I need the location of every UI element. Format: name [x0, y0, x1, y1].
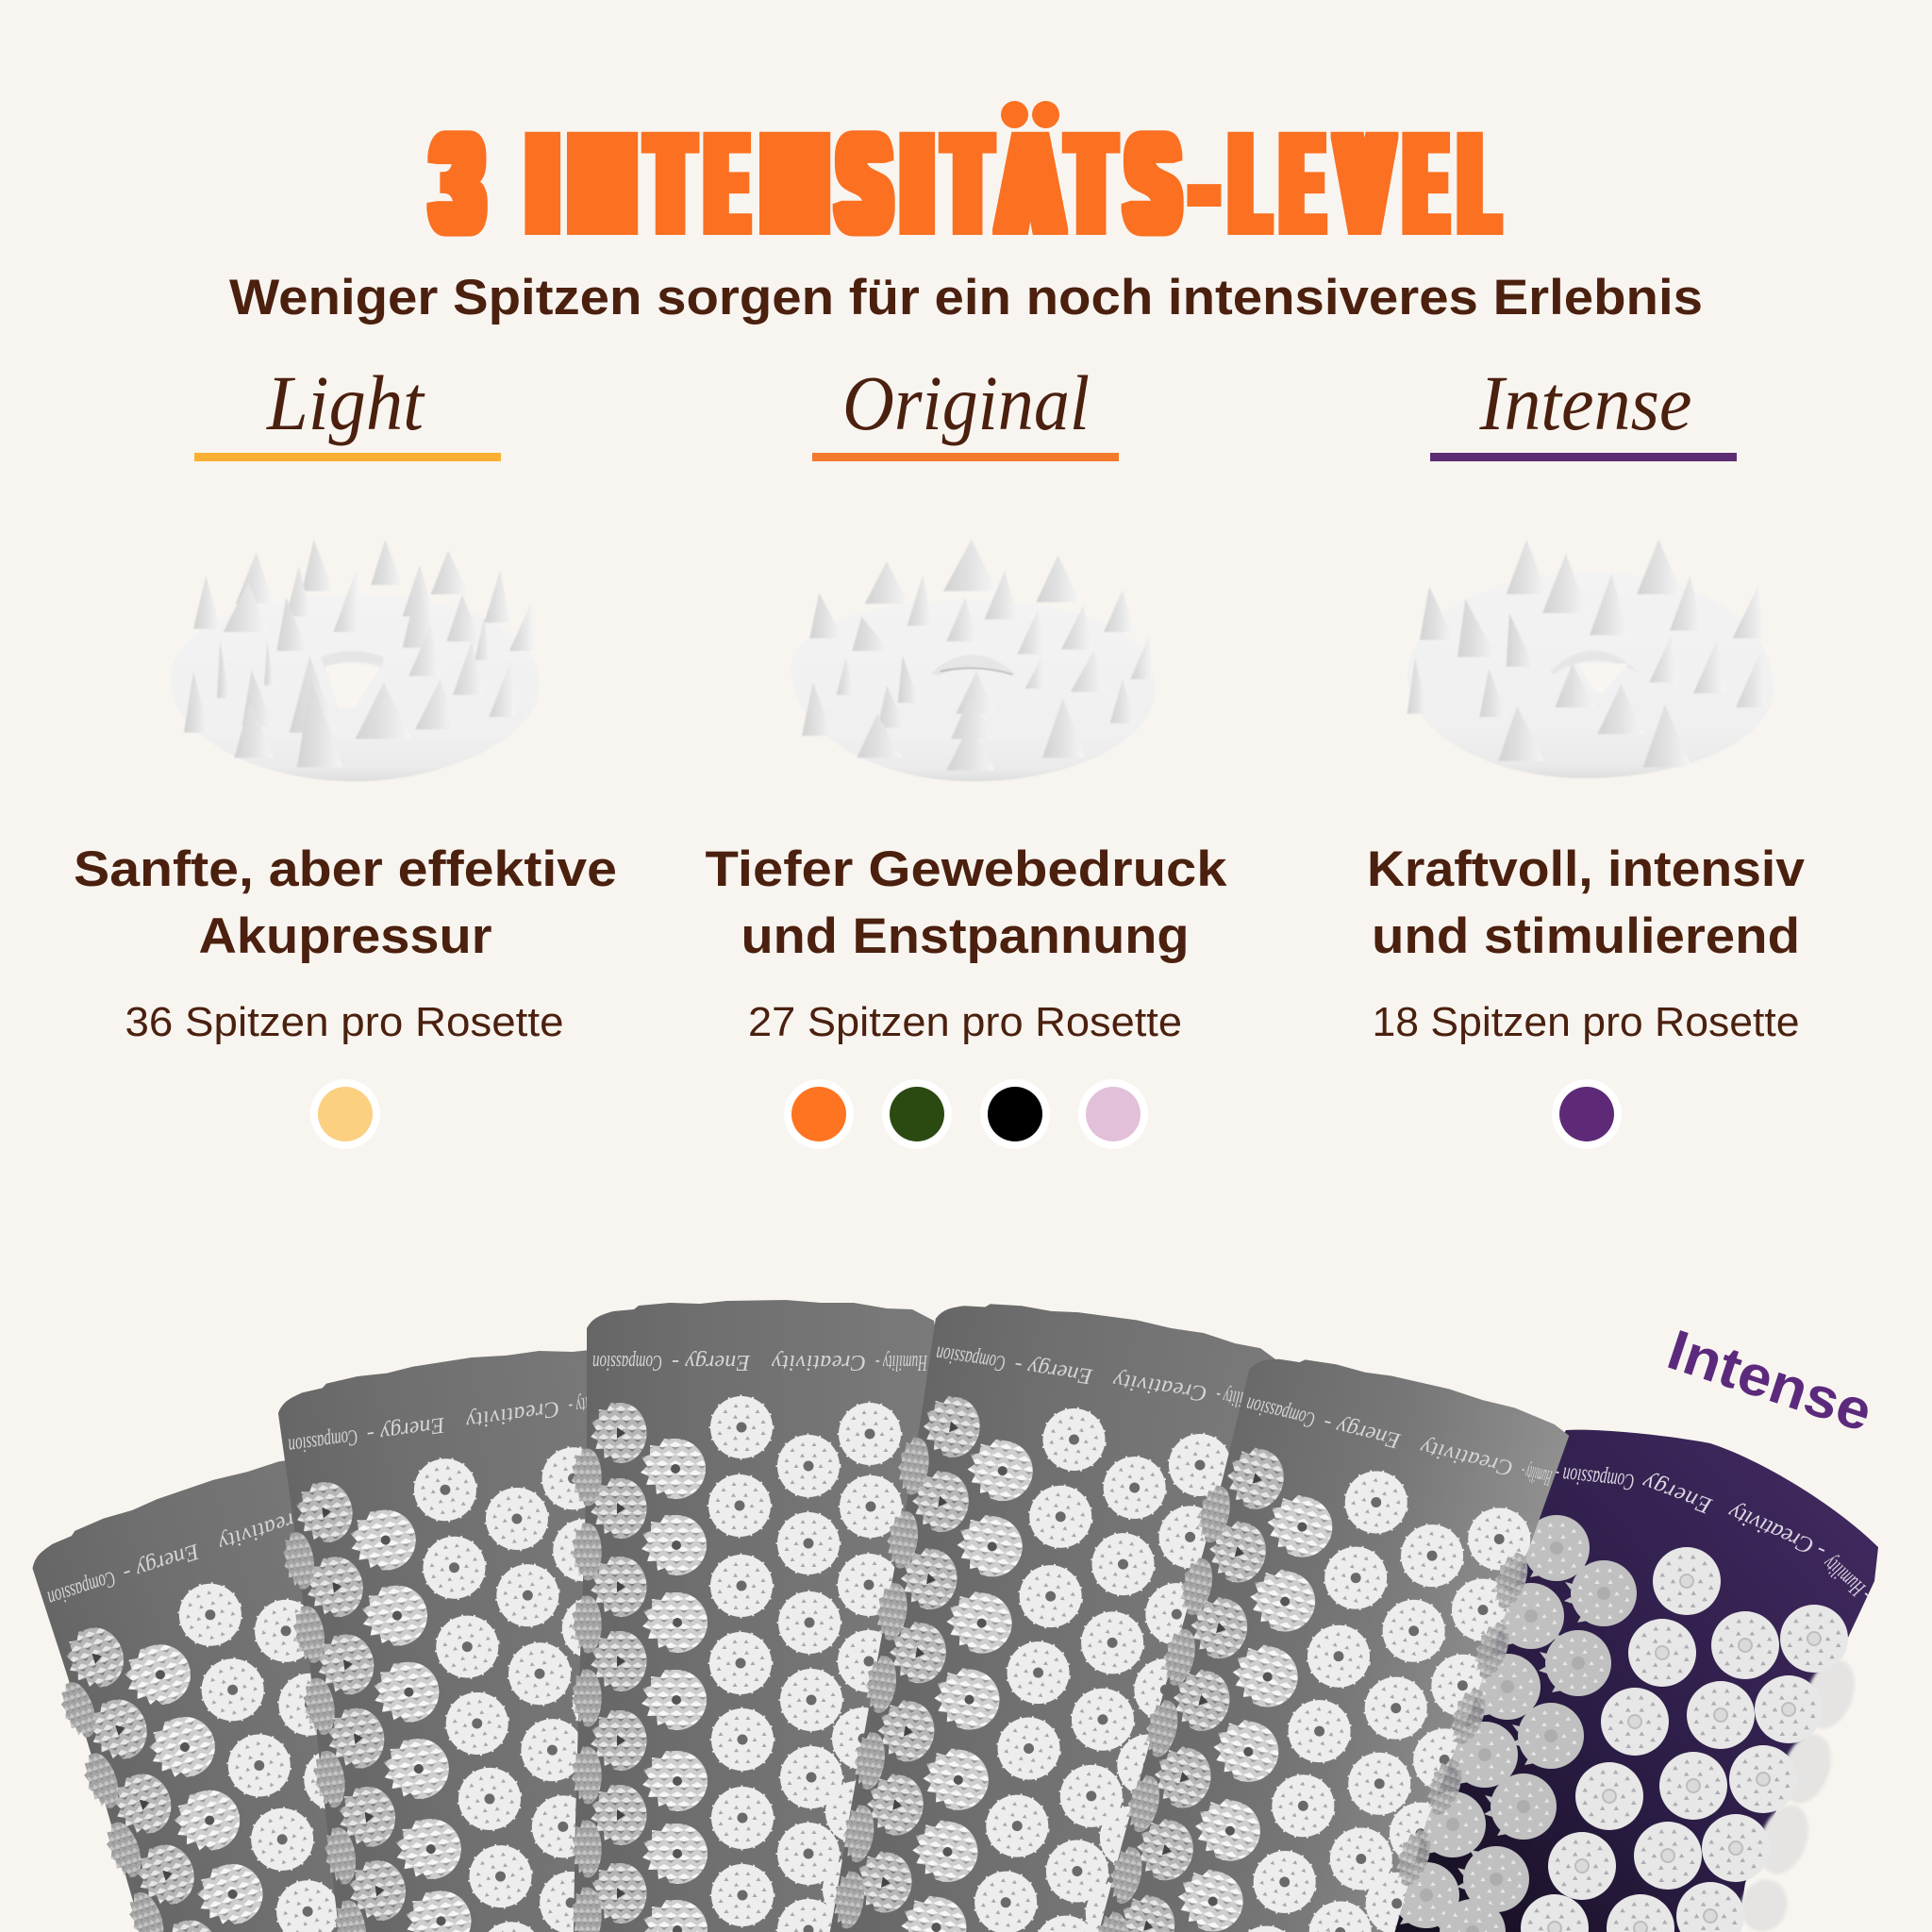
underline: Intense: [1430, 453, 1737, 461]
title: I: [907, 104, 928, 262]
mat: grey 2: Compassion: [287, 1424, 359, 1458]
mat: grey 3: [566, 1300, 953, 1932]
mat: purple intense: - Creativity: [1724, 1498, 1830, 1564]
mat: purple intense: - Humility: [1818, 1551, 1875, 1607]
title: T: [948, 104, 987, 262]
title: E: [1284, 104, 1321, 262]
umlaut dots of the title: [991, 94, 1072, 130]
level name: Original: Original: [842, 359, 1090, 446]
level name: Light: Light: [266, 359, 425, 446]
title: E: [708, 104, 745, 262]
mat: grey 4: Creativity: [1111, 1368, 1208, 1406]
benefit heading: light: Akupressur: [198, 908, 492, 964]
mat: grey 2: Energy -: [365, 1412, 447, 1447]
title: Ä: [1003, 104, 1058, 262]
title: S: [1130, 104, 1175, 262]
mat: grey 1: Compassion: [44, 1566, 119, 1610]
subtitle: Weniger Spitzen sorgen für ein noch intensiveres Erlebnis: [229, 270, 1703, 325]
icon: rosette with 27 spikes: [791, 540, 1156, 781]
mat: grey 1: [4, 1428, 626, 1932]
mat: grey 3: Compassion: [592, 1350, 662, 1374]
title: I: [532, 104, 554, 262]
benefit heading: intense: und stimulierend: [1372, 908, 1800, 964]
spike count: light: 36 Spitzen pro Rosette: [125, 999, 564, 1045]
mat: grey 4: Humility -: [1214, 1383, 1270, 1415]
mat: grey 5: [1098, 1358, 1570, 1932]
mat: grey 5: Energy -: [1321, 1410, 1404, 1453]
underline: Light: [194, 453, 501, 461]
title: L: [1233, 104, 1267, 262]
benefit heading: original: und Enstpannung: [741, 908, 1189, 964]
mat: grey 4: Compassion: [934, 1341, 1008, 1375]
underline: Original: [812, 453, 1119, 461]
title: T: [1072, 104, 1110, 262]
spike count: original: 27 Spitzen pro Rosette: [748, 999, 1182, 1045]
mat: purple intense: Energy: [1639, 1469, 1716, 1519]
mat: grey 2: [254, 1334, 751, 1932]
mat: grey 2: Humility -: [567, 1388, 623, 1419]
colour swatch: purple: [1552, 1079, 1622, 1149]
title: N: [575, 104, 630, 262]
mat: grey 3: Humility -: [875, 1350, 928, 1374]
benefit heading: intense: [1367, 841, 1806, 964]
mat: grey 5: Creativity: [1418, 1434, 1515, 1480]
benefit heading: light: [74, 841, 617, 964]
colour swatches: orange, green, black, pink: [784, 1079, 1148, 1149]
mat: grey 1: Creativity: [215, 1503, 312, 1556]
title: N: [767, 104, 823, 262]
purple mat folded rosettes over grey edge: [1390, 1549, 1534, 1890]
benefit heading: light: Sanfte, aber effektive: [74, 841, 617, 897]
mat: grey 5: Compassion: [1244, 1391, 1318, 1432]
mat: grey 4: [798, 1288, 1302, 1932]
icon: rosette with 18 spikes: [1407, 540, 1774, 778]
title: [426, 104, 1504, 262]
level name: Intense: Intense: [1479, 359, 1692, 446]
spike count: intense: 18 Spitzen pro Rosette: [1372, 999, 1800, 1045]
title: -: [1194, 104, 1214, 262]
mat: grey 2: Creativity: [464, 1396, 561, 1433]
colour swatch: yellow: [310, 1079, 380, 1149]
mat: grey 1: Humility -: [314, 1484, 371, 1524]
panel: intense: [1367, 359, 1806, 1149]
title: T: [651, 104, 690, 262]
mat: purple intense: Compassion -: [1553, 1461, 1636, 1494]
benefit heading: original: [706, 841, 1227, 964]
title: L: [1462, 104, 1496, 262]
benefit heading: original: Tiefer Gewebedruck: [706, 841, 1227, 897]
mat: grey 5: Humility -: [1519, 1458, 1555, 1490]
title: S: [841, 104, 887, 262]
icon: rosette with 36 spikes: [171, 540, 540, 781]
benefit heading: intense: Kraftvoll, intensiv: [1367, 841, 1806, 897]
rotated label: Intense: Intense: [1660, 1318, 1880, 1443]
title: 3: [437, 104, 478, 262]
title: V: [1341, 104, 1388, 262]
mat: purple intense: [1321, 1430, 1878, 1932]
mat: grey 3: Creativity: [772, 1350, 866, 1374]
title: E: [1407, 104, 1444, 262]
mat: grey 1: Energy -: [120, 1539, 203, 1586]
mat: grey 4: Energy -: [1013, 1353, 1094, 1389]
panel: light: [74, 359, 617, 1149]
mat: grey 3: Energy -: [672, 1350, 751, 1374]
panel: original: [706, 359, 1227, 1149]
